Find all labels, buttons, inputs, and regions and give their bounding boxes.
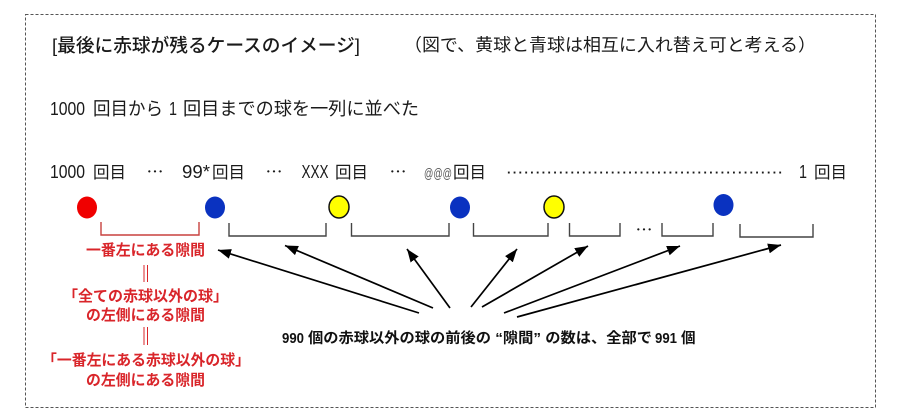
equals bars <box>144 265 148 345</box>
yellow ball 2 <box>544 196 564 218</box>
sequence labels row: … <box>146 158 164 183</box>
description line <box>50 99 419 119</box>
description line: 1 <box>169 99 177 119</box>
sequence labels row: XXX <box>302 162 328 182</box>
red explanation stack: の左側にある隙間 <box>86 372 205 389</box>
red explanation stack: 一番左にある隙間 <box>86 242 205 259</box>
balls row <box>77 194 734 218</box>
red ball <box>77 196 97 218</box>
note: yellow and blue are interchangeable: （図で、黄球と青球は相互に入れ替え可と考える） <box>404 35 816 55</box>
red explanation stack: 「一番左にある赤球以外の球」 <box>42 351 250 369</box>
description line: 回目から <box>93 99 163 119</box>
ellipsis between brackets: … <box>636 216 652 241</box>
sequence labels row <box>50 158 847 183</box>
bottom caption: 991 <box>655 331 677 347</box>
sequence labels row: 99* <box>182 162 210 182</box>
bottom caption: 個の赤球以外の球の前後の “隙間” の数は、全部で <box>308 329 652 347</box>
sequence labels row: 回目 <box>335 164 368 182</box>
red explanation stack: の左側にある隙間 <box>86 307 205 324</box>
arrows to gaps <box>218 245 781 317</box>
sequence labels row: 1000 <box>50 162 85 182</box>
sequence labels row: … <box>390 158 406 183</box>
bottom caption: 個 <box>681 330 696 347</box>
bottom caption: 990 <box>282 331 304 347</box>
yellow ball 1 <box>329 196 349 218</box>
gap brackets <box>101 222 813 237</box>
description line: 1000 <box>50 99 85 119</box>
sequence labels row: ................................................ <box>507 162 782 176</box>
sequence labels row: @@@ <box>424 165 452 181</box>
sequence labels row: 1 <box>799 162 807 182</box>
description line: 回目までの球を一列に並べた <box>183 99 419 119</box>
sequence labels row: 回目 <box>212 164 245 182</box>
blue ball 3 <box>714 194 734 216</box>
sequence labels row: 回目 <box>93 164 126 182</box>
red bracket: leftmost gap <box>101 222 199 235</box>
red explanation stack <box>42 242 250 389</box>
blue ball 2 <box>450 196 470 218</box>
sequence labels row: 回目 <box>814 164 847 182</box>
title: [最後に赤球が残るケースのイメージ] <box>52 35 360 56</box>
gray brackets <box>229 223 813 237</box>
blue ball 1 <box>205 196 225 218</box>
sequence labels row: 回目 <box>453 164 486 182</box>
sequence labels row: … <box>266 158 282 183</box>
red explanation stack: 「全ての赤球以外の球」 <box>63 287 228 305</box>
